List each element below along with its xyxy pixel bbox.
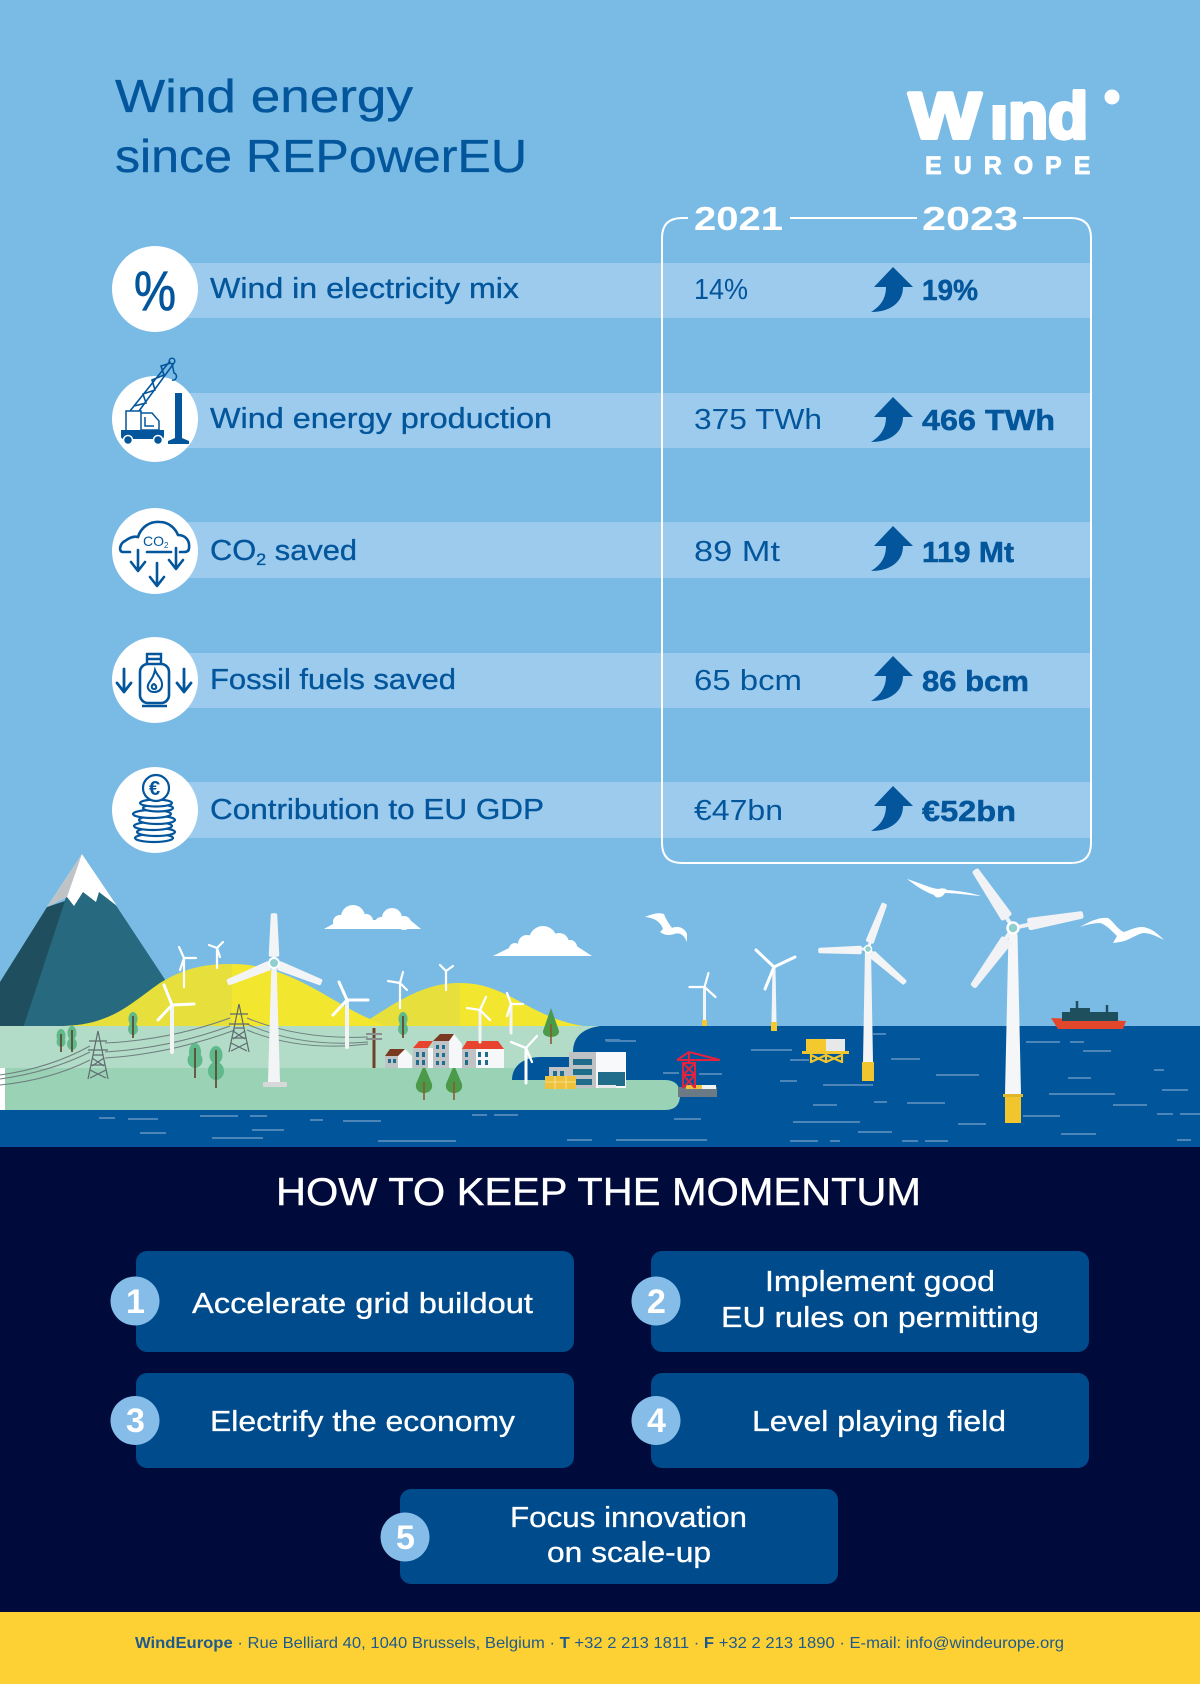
icon: percent — [112, 246, 198, 332]
label: Wind in electricity mix — [210, 273, 520, 305]
value 2021: 14% — [694, 274, 748, 306]
icon: euro coin stack — [112, 767, 198, 853]
comparison frame with year headers: 2021 — [694, 200, 783, 237]
title — [115, 70, 527, 182]
arrow up — [871, 526, 913, 571]
card 3: 3 — [126, 1402, 145, 1440]
offshore turbine: smallest — [690, 973, 716, 1026]
card 2: Implement good — [765, 1266, 995, 1298]
sky background — [0, 0, 1200, 1150]
land: lower meadow — [0, 1068, 680, 1110]
value 2023: 19% — [922, 275, 978, 307]
land: upper meadow — [0, 1026, 600, 1080]
label: Contribution to EU GDP — [210, 794, 544, 826]
logo: WindEurope: ind — [990, 79, 1088, 152]
arrow up — [871, 786, 913, 831]
card 2 — [632, 1251, 1089, 1352]
card 1: 1 — [126, 1283, 145, 1321]
value 2021: 65 bcm — [694, 665, 802, 697]
card 3 — [110, 1373, 574, 1468]
village houses — [385, 1034, 504, 1068]
comparison frame with year headers: 2023 — [922, 200, 1018, 237]
logo: WindEurope: W — [909, 79, 982, 152]
large land turbine — [228, 915, 321, 1087]
logo: WindEurope: EUROPE — [925, 152, 1090, 180]
card 5 — [380, 1489, 838, 1584]
card 4: 4 — [647, 1402, 666, 1440]
label: CO — [210, 535, 254, 567]
offshore turbine: largest — [973, 871, 1081, 1123]
icon: CO2 cloud with down arrows: 2 — [164, 541, 169, 550]
title: Wind energy — [115, 70, 413, 122]
label: Fossil fuels saved — [210, 664, 456, 696]
label: Wind energy production — [210, 403, 552, 435]
card 1: Accelerate grid buildout — [192, 1288, 533, 1320]
clouds — [324, 905, 592, 956]
landscape illustration — [0, 854, 1200, 1147]
icon: crane and turbine tower — [112, 358, 198, 462]
value 2023: 86 bcm — [922, 666, 1029, 698]
row: CO2 saved — [112, 508, 1014, 594]
utility pole — [366, 1028, 382, 1068]
offshore turbine: medium — [820, 904, 905, 1081]
distant turbines on the hills — [179, 942, 453, 1008]
electricity pylons — [88, 1004, 249, 1079]
power lines — [0, 1018, 368, 1085]
icon: CO2 cloud with down arrows: CO — [143, 533, 164, 549]
sea — [0, 1026, 1200, 1147]
icon: euro coin stack: € — [149, 778, 160, 800]
label: 2 — [256, 550, 266, 569]
row: wind in electricity mix — [112, 246, 978, 332]
card 2: EU rules on permitting — [721, 1302, 1039, 1334]
comparison frame with year headers — [662, 200, 1091, 863]
value 2021: 375 TWh — [694, 404, 822, 436]
yellow hills — [60, 964, 590, 1027]
dark action panel — [0, 1147, 1200, 1612]
row: contribution to EU GDP — [112, 767, 1016, 853]
offshore platform — [802, 1039, 849, 1063]
harbour buildings — [512, 1052, 626, 1089]
arrow up — [871, 267, 913, 312]
white building sliver at edge — [0, 1068, 5, 1110]
conifer trees — [416, 1008, 559, 1100]
heading: how to keep the momentum: HOW TO KEEP THE MOMENTUM — [276, 1171, 921, 1214]
card 4: Level playing field — [752, 1406, 1006, 1438]
port crane and barge — [677, 1052, 720, 1097]
card 5: Focus innovation — [510, 1502, 747, 1534]
sea surface ripples — [99, 1034, 1200, 1141]
offshore turbine: small — [756, 950, 795, 1031]
value 2023: 119 Mt — [922, 537, 1014, 569]
land turbines — [158, 982, 537, 1083]
icon: percent: % — [134, 259, 176, 322]
metric row bands — [155, 263, 1091, 838]
icon: mountain — [0, 854, 190, 1026]
icon: CO2 cloud with down arrows — [112, 508, 198, 594]
footer contact text: WindEurope · Rue Belliard 40, 1040 Brussels, Belgium · T +32 2 213 1811 · F +32 2 213 1890 · E-mail: info@windeurope.org — [135, 1635, 1064, 1652]
card 1 — [110, 1251, 574, 1352]
label: saved — [266, 535, 357, 567]
value 2023: 466 TWh — [922, 405, 1055, 437]
value 2021: €47bn — [694, 795, 783, 827]
ship — [1051, 1001, 1126, 1029]
birds — [645, 879, 1164, 943]
value 2021: 89 Mt — [694, 536, 780, 568]
row: wind energy production — [112, 358, 1055, 462]
icon: gas cylinder with down arrows — [112, 637, 198, 723]
card 3: Electrify the economy — [210, 1406, 516, 1438]
logo: WindEurope — [909, 79, 1120, 180]
arrow up — [871, 397, 913, 442]
value 2023: €52bn — [922, 796, 1016, 828]
deciduous trees — [56, 1012, 408, 1088]
card 5: on scale-up — [547, 1537, 711, 1569]
arrow up — [871, 656, 913, 701]
card 5: 5 — [396, 1519, 415, 1557]
card 2: 2 — [647, 1283, 666, 1321]
footer band — [0, 1612, 1200, 1684]
row: fossil fuels saved — [112, 637, 1029, 723]
title: since REPowerEU — [115, 130, 527, 182]
card 4 — [632, 1373, 1089, 1468]
